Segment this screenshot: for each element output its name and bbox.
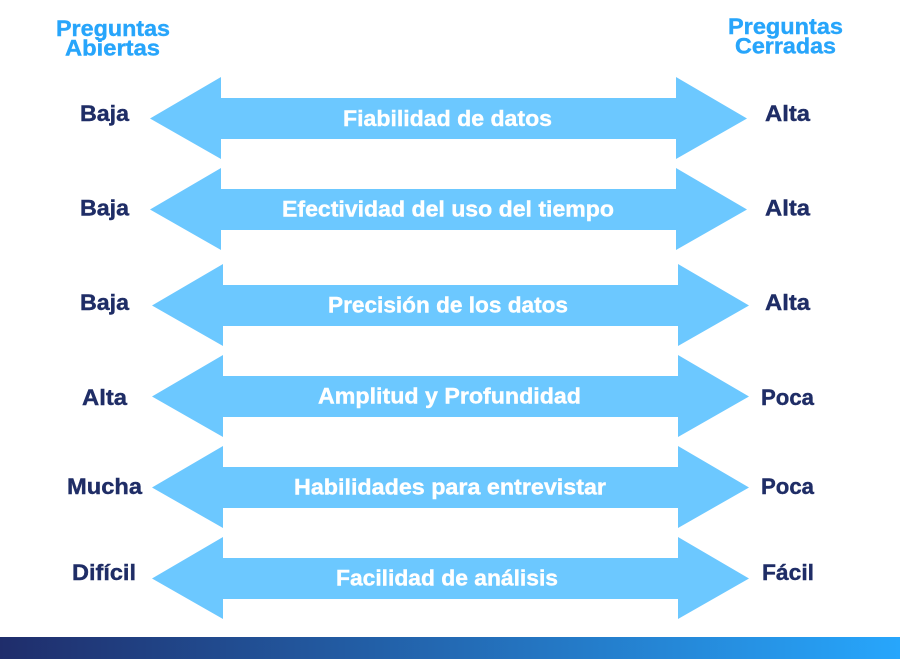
arrow label 2: Efectividad del uso del tiempo — [282, 196, 614, 222]
arrow label 4: Amplitud y Profundidad — [318, 384, 581, 408]
heading: Preguntas Abiertas: Preguntas — [56, 16, 170, 41]
left value 3: Baja — [80, 290, 129, 315]
right value 5: Poca — [761, 474, 814, 499]
row 5: Habilidades para entrevistar — [67, 446, 814, 528]
arrow 5 — [152, 446, 749, 528]
left value 1: Baja — [80, 101, 129, 126]
footer gradient bar — [0, 637, 900, 659]
arrow label 5: Habilidades para entrevistar — [294, 474, 606, 500]
row 1: Fiabilidad de datos — [80, 77, 811, 159]
right value 6: Fácil — [762, 560, 814, 585]
row 6: Facilidad de análisis — [72, 537, 814, 619]
arrow label 6: Facilidad de análisis — [336, 566, 558, 590]
heading: Preguntas Cerradas — [728, 14, 843, 58]
right value 2: Alta — [765, 196, 811, 220]
arrow 1 — [150, 77, 747, 159]
heading: Preguntas Abiertas: Abiertas — [65, 36, 160, 60]
row 3: Precisión de los datos — [80, 264, 811, 346]
left value 4: Alta — [82, 385, 128, 410]
left value 5: Mucha — [67, 474, 143, 499]
arrow 3 — [152, 264, 749, 346]
arrow 4 — [152, 355, 749, 437]
arrow 6 — [152, 537, 749, 619]
right value 1: Alta — [765, 101, 811, 126]
arrow label 1: Fiabilidad de datos — [343, 106, 552, 131]
row 2: Efectividad del uso del tiempo — [80, 168, 811, 250]
left value 6: Difícil — [72, 560, 136, 585]
arrow label 3: Precisión de los datos — [328, 292, 568, 317]
left value 2: Baja — [80, 196, 129, 220]
heading: Preguntas Abiertas — [56, 16, 170, 60]
heading: Preguntas Cerradas: Preguntas — [728, 14, 843, 39]
row 4: Amplitud y Profundidad — [82, 355, 814, 437]
heading: Preguntas Cerradas: Cerradas — [735, 34, 836, 58]
right value 4: Poca — [761, 385, 814, 410]
right value 3: Alta — [765, 290, 811, 315]
arrow 2 — [150, 168, 747, 250]
